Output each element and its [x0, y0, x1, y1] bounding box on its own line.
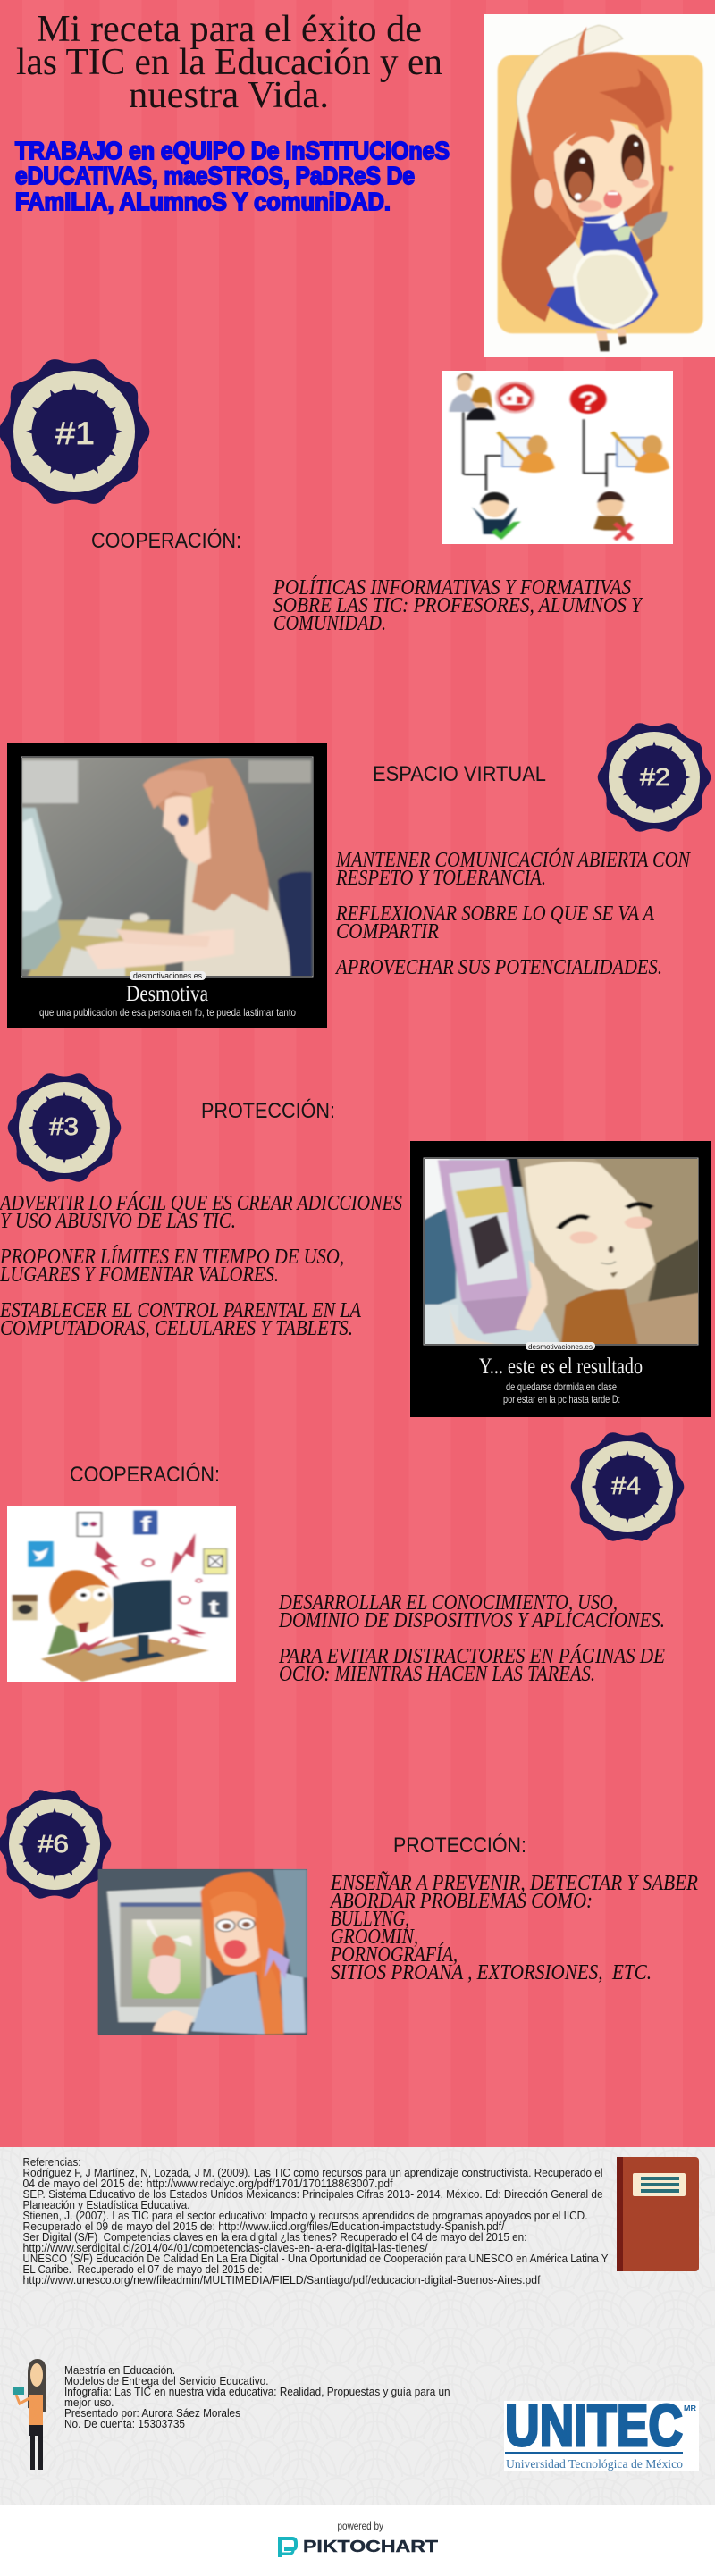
image: y este es el resultado poster: de quedarse dormida en clase	[506, 1380, 617, 1393]
title	[16, 9, 442, 116]
badge #6: #6	[38, 1830, 69, 1858]
heading: cooperación 2: COOPERACIÓN:	[70, 1463, 220, 1487]
heading: protección 2: PROTECCIÓN:	[393, 1833, 526, 1858]
logo: piktochart: PIKTOCHART	[303, 2538, 438, 2555]
badge #3	[8, 1073, 121, 1182]
text: powered by: powered by	[338, 2520, 383, 2532]
text: referencias	[23, 2155, 609, 2287]
text: desarrollar: DESARROLLAR EL CONOCIMIENTO, USO,	[278, 1591, 618, 1615]
text: advertir	[0, 1192, 402, 1340]
subtitle: blue team text: eDUCATIVAS, maeSTROS, PaDReS De	[15, 162, 415, 189]
text: student credits: No. De cuenta: 15303735	[64, 2417, 185, 2430]
subtitle: blue team text	[15, 137, 450, 215]
text: mantener comunicación: REFLEXIONAR SOBRE LO QUE SE VA A	[335, 902, 654, 926]
logo: unitec: Universidad Tecnológica de México	[506, 2458, 683, 2471]
image: boy distracted by social networks	[7, 1506, 236, 1682]
title: las TIC en la Educación y en	[16, 42, 442, 83]
text: referencias: Ser Digital (S/F) Competencias claves en la era digital ¿las tienes? Recuperado el 04 de mayo del 2015 en:	[23, 2230, 527, 2244]
text: desarrollar: PARA EVITAR DISTRACTORES EN PÁGINAS DE	[278, 1645, 665, 1668]
text: referencias: SEP. Sistema Educativo de los Estados Unidos Mexicanos: Principales Cifras 2013- 2014. México. Ed: Dirección General de	[23, 2187, 602, 2201]
text: referencias: 04 de mayo del 2015 de: http://www.redalyc.org/pdf/1701/170118863007.pdf	[23, 2177, 393, 2190]
image: boy distracted by social networks: t	[209, 1597, 220, 1619]
text: enseñar a prevenir: ABORDAR PROBLEMAS COMO:	[329, 1890, 593, 1913]
text: referencias: Planeación y Estadística Educativa.	[23, 2198, 189, 2211]
text: advertir: ESTABLECER EL CONTROL PARENTAL EN LA	[0, 1299, 361, 1322]
text: políticas: POLÍTICAS INFORMATIVAS Y FORMATIVAS	[273, 576, 631, 600]
text: advertir: PROPONER LÍMITES EN TIEMPO DE USO,	[0, 1246, 344, 1269]
text: referencias: Recuperado el 09 de mayo del 2015 de: http://www.iicd.org/files/Education-impactstudy-Spanish.pdf/	[23, 2219, 505, 2233]
text: mantener comunicación: APROVECHAR SUS POTENCIALIDADES.	[334, 956, 662, 979]
text: advertir: ADVERTIR LO FÁCIL QUE ES CREAR ADICCIONES	[0, 1192, 402, 1215]
text: enseñar a prevenir: BULLYNG,	[331, 1908, 409, 1931]
text: student credits: Maestría en Educación.	[64, 2363, 175, 2377]
title: Mi receta para el éxito de	[37, 9, 422, 50]
image: desmotiva poster: Desmotiva	[126, 982, 208, 1006]
text: advertir: COMPUTADORAS, CELULARES Y TABLETS.	[0, 1317, 353, 1340]
text: enseñar a prevenir: SITIOS PROANA , EXTORSIONES, ETC.	[331, 1961, 652, 1984]
badge #2: #2	[640, 763, 670, 791]
subtitle: blue team text: TRABAJO en eQUIPO De InSTITUCIOneS	[15, 137, 450, 164]
text: políticas: COMUNIDAD.	[273, 612, 386, 635]
text: mantener comunicación: COMPARTIR	[336, 920, 439, 944]
text: mantener comunicación: RESPETO Y TOLERANCIA.	[335, 867, 546, 890]
image: boy distracted by social networks: f	[140, 1514, 152, 1536]
heading: protección: PROTECCIÓN:	[201, 1099, 335, 1123]
image: desmotiva poster	[7, 743, 327, 1028]
image: desmotiva poster: que una publicacion de esa persona en fb, te pueda lastimar tanto	[39, 1006, 296, 1019]
text: student credits: Infografía: Las TIC en nuestra vida educativa: Realidad, Propuestas y guía para un	[64, 2385, 450, 2398]
badge #1: #1	[55, 416, 95, 451]
image: y este es el resultado poster: Y... este es el resultado	[479, 1355, 643, 1379]
text: referencias: UNESCO (S/F) Educación De Calidad En La Era Digital - Una Oportunidad de Cooperación para UNESCO en América Latina Y	[23, 2252, 609, 2265]
text: enseñar a prevenir: GROOMIN,	[331, 1926, 418, 1949]
background: paper footer	[0, 2147, 715, 2505]
badge #6	[0, 1790, 111, 1899]
text: desarrollar: DOMINIO DE DISPOSITIVOS Y APLICACIONES.	[278, 1609, 665, 1632]
text: referencias: Stienen, J. (2007). Las TIC para el sector educativo: Impacto y recursos aprendidos de programas apoyados por el IICD.	[23, 2209, 588, 2222]
text: políticas: SOBRE LAS TIC: PROFESORES, ALUMNOS Y	[273, 594, 644, 617]
badge #4: #4	[611, 1472, 641, 1499]
background: white credit band	[0, 2505, 715, 2576]
text: referencias: EL Caribe. Recuperado el 07 de mayo del 2015 de:	[23, 2262, 263, 2276]
text: referencias: http://www.serdigital.cl/2014/04/01/competencias-claves-en-la-era-digital-las-tienes/	[23, 2241, 428, 2254]
text: student credits: Modelos de Entrega del Servicio Educativo.	[64, 2374, 268, 2387]
text: referencias: Referencias:	[23, 2155, 80, 2169]
text: referencias: http://www.unesco.org/new/fileadmin/MULTIMEDIA/FIELD/Santiago/pdf/educacion-digital-Buenos-Aires.pdf	[23, 2273, 541, 2287]
heading: cooperación: COOPERACIÓN:	[91, 529, 241, 553]
text: desarrollar	[278, 1591, 665, 1686]
image: desmotiva poster: desmotivaciones.es	[133, 971, 202, 980]
image: y este es el resultado poster: desmotivaciones.es	[528, 1342, 593, 1351]
text: desarrollar: OCIO: MIENTRAS HACEN LAS TAREAS.	[279, 1663, 595, 1686]
text: enseñar a prevenir	[329, 1871, 698, 1984]
image: y este es el resultado poster	[410, 1141, 711, 1417]
subtitle: blue team text: FAmILIA, ALumnoS Y comuniDAD.	[15, 188, 391, 215]
logo: unitec: MR	[684, 2404, 696, 2412]
image: y este es el resultado poster: por estar en la pc hasta tarde D:	[503, 1393, 620, 1405]
image: chibi maid girl	[484, 14, 715, 357]
text: advertir: LUGARES Y FOMENTAR VALORES.	[0, 1263, 279, 1287]
text: student credits: Presentado por: Aurora Sáez Morales	[64, 2406, 240, 2420]
icon: woman with tablet	[13, 2359, 46, 2470]
badge #4	[571, 1432, 684, 1541]
image: parent-child flow diagram	[442, 371, 673, 544]
text: enseñar a prevenir: PORNOGRAFÍA,	[330, 1943, 458, 1967]
badge #3: #3	[49, 1112, 79, 1140]
heading: espacio virtual: ESPACIO VIRTUAL	[373, 762, 546, 786]
title: nuestra Vida.	[129, 75, 329, 116]
text: student credits	[64, 2363, 450, 2430]
text: referencias: Rodríguez F, J Martínez, N, Lozada, J M. (2009). Las TIC como recursos para un aprendizaje constructivista. Recuperado el	[23, 2166, 603, 2179]
text: advertir: Y USO ABUSIVO DE LAS TIC.	[0, 1210, 236, 1233]
text: mantener comunicación	[334, 848, 692, 979]
text: políticas	[273, 576, 644, 635]
logo: piktochart	[280, 2538, 438, 2557]
badge #1	[0, 359, 149, 504]
text: student credits: mejor uso.	[64, 2396, 114, 2409]
icon: book	[617, 2157, 699, 2271]
badge #2	[598, 723, 711, 832]
image: startled orange-haired girl at computer	[98, 1869, 307, 2035]
image: parent-child flow diagram: ?	[578, 387, 598, 415]
